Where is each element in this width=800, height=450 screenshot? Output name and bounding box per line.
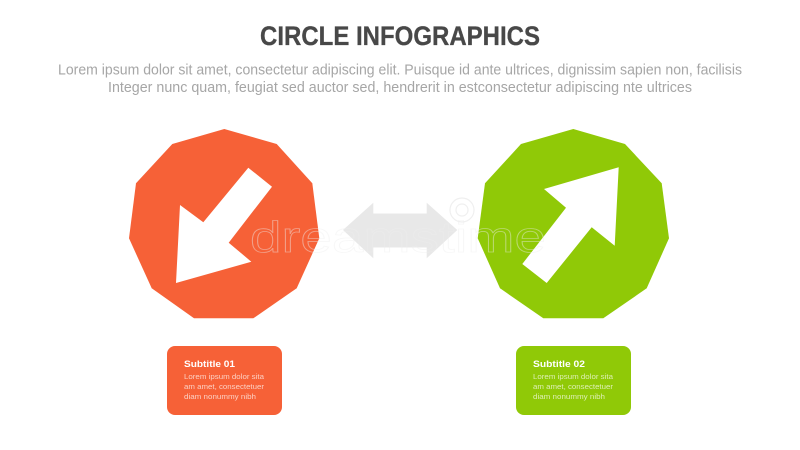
- left subtitle card: [167, 346, 282, 415]
- card background: [167, 346, 282, 415]
- card background: [516, 346, 631, 415]
- card text: am amet, consectetuer: [184, 382, 265, 391]
- intro text: Lorem ipsum dolor sit amet, consectetur adipiscing elit. Puisque id ante ultrices, dignissim sapien non, facilisis: [58, 62, 742, 78]
- title: CIRCLE INFOGRAPHICS: [260, 21, 540, 51]
- intro text: [58, 62, 742, 96]
- intro text: Integer nunc quam, feugiat sed auctor sed, hendrerit in estconsectetur adipiscing nte ultrices: [108, 80, 692, 96]
- card text: am amet, consectetuer: [533, 382, 614, 391]
- card text: Lorem ipsum dolor sita: [533, 372, 614, 381]
- double-headed arrow: [343, 203, 457, 258]
- card text: Lorem ipsum dolor sita: [184, 372, 265, 381]
- card text: diam nonummy nibh: [533, 392, 605, 401]
- card text: [533, 372, 614, 401]
- card text: diam nonummy nibh: [184, 392, 256, 401]
- left badge: orange polygon with down-left arrow: [129, 129, 319, 318]
- card heading: Subtitle 01: [184, 359, 235, 369]
- icon: up-right arrow: [522, 167, 619, 283]
- right badge: green polygon with up-right arrow: [478, 129, 669, 318]
- icon: down-left arrow: [176, 168, 272, 283]
- card heading: Subtitle 02: [533, 359, 585, 369]
- card text: [184, 372, 265, 401]
- watermark: dreamstime: [250, 213, 546, 262]
- right subtitle card: [516, 346, 631, 415]
- orange polygon: [129, 129, 319, 318]
- watermark: [250, 198, 546, 262]
- green polygon: [478, 129, 669, 318]
